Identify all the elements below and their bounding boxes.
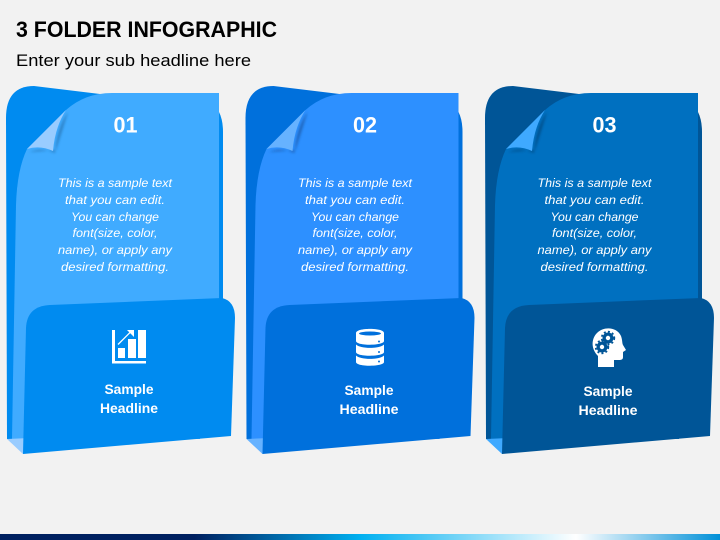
- folder 2 front page: [252, 93, 458, 439]
- title: 3 FOLDER INFOGRAPHIC: [16, 17, 277, 42]
- folder 2 body text: This is a sample text: [298, 176, 413, 190]
- folder 1 body text: that you can edit.: [65, 193, 165, 207]
- folder 1: [6, 86, 235, 454]
- folder 1 body text: name), or apply any: [58, 243, 173, 257]
- folder 3 headline: Headline: [578, 402, 638, 418]
- folder 3 bottom flap: [486, 438, 509, 454]
- folder 2 body text: [298, 176, 413, 274]
- folder 3 body text: This is a sample text: [538, 176, 652, 190]
- folder 1 curl shadow: [30, 112, 68, 153]
- folder 1 body text: You can change: [71, 210, 159, 224]
- folder 1 page curl: [27, 110, 66, 151]
- folder 3 headline: [578, 383, 638, 418]
- folder 2 pocket: [262, 298, 474, 454]
- folder 3 body text: desired formatting.: [540, 260, 648, 274]
- folder 1 body text: font(size, color,: [72, 226, 158, 240]
- folder 2 bottom flap: [246, 438, 270, 454]
- folder 1 body text: This is a sample text: [58, 176, 173, 190]
- folder 1 front page: [12, 93, 219, 439]
- folder 1 back sheet: [6, 86, 223, 440]
- folder 2 headline: Sample: [344, 382, 394, 398]
- folder 2 body text: desired formatting.: [301, 260, 409, 274]
- folder 3 body text: name), or apply any: [538, 243, 653, 257]
- folder 1 body text: [58, 176, 173, 274]
- folder 3 pocket: [502, 298, 714, 454]
- folder 3 body text: that you can edit.: [544, 193, 644, 207]
- folder 3 number: 03: [592, 112, 616, 138]
- folder 1 headline: Headline: [100, 400, 158, 416]
- icon: bar chart: [112, 330, 146, 364]
- folder 3 front page: [491, 93, 698, 439]
- folder 3 body text: [538, 176, 653, 274]
- folder 2 body text: font(size, color,: [312, 226, 398, 240]
- folder 3 curl shadow: [509, 112, 547, 153]
- icon: head with gears: [593, 328, 626, 367]
- subtitle: Enter your sub headline here: [16, 51, 251, 70]
- folder 3 page curl: [506, 110, 545, 151]
- folder 2 back sheet: [246, 86, 462, 440]
- folder 2 body text: You can change: [311, 210, 399, 224]
- icon: database: [356, 329, 384, 366]
- folder 3 body text: You can change: [550, 210, 639, 224]
- folder 2 headline: [340, 382, 399, 417]
- folder 1 headline: Sample: [104, 381, 154, 397]
- folder 2 number: 02: [353, 112, 377, 138]
- bottom gradient bar: [0, 534, 720, 540]
- folder 1 headline: [100, 381, 158, 416]
- folder 1 pocket: [23, 298, 235, 454]
- folder 1 number: 01: [114, 112, 138, 138]
- folder 1 bottom flap: [7, 438, 30, 454]
- folder 2 headline: Headline: [340, 401, 399, 417]
- folder 3: [485, 86, 714, 454]
- folder 3 body text: font(size, color,: [552, 226, 637, 240]
- folder 2 curl shadow: [270, 112, 308, 153]
- folder 2: [246, 86, 474, 454]
- folder 1 body text: desired formatting.: [61, 260, 169, 274]
- folder 2 body text: name), or apply any: [298, 243, 413, 257]
- folder 3 back sheet: [485, 86, 702, 440]
- folder 2 page curl: [266, 110, 306, 151]
- folder 2 body text: that you can edit.: [305, 193, 405, 207]
- folder 3 headline: Sample: [584, 383, 633, 399]
